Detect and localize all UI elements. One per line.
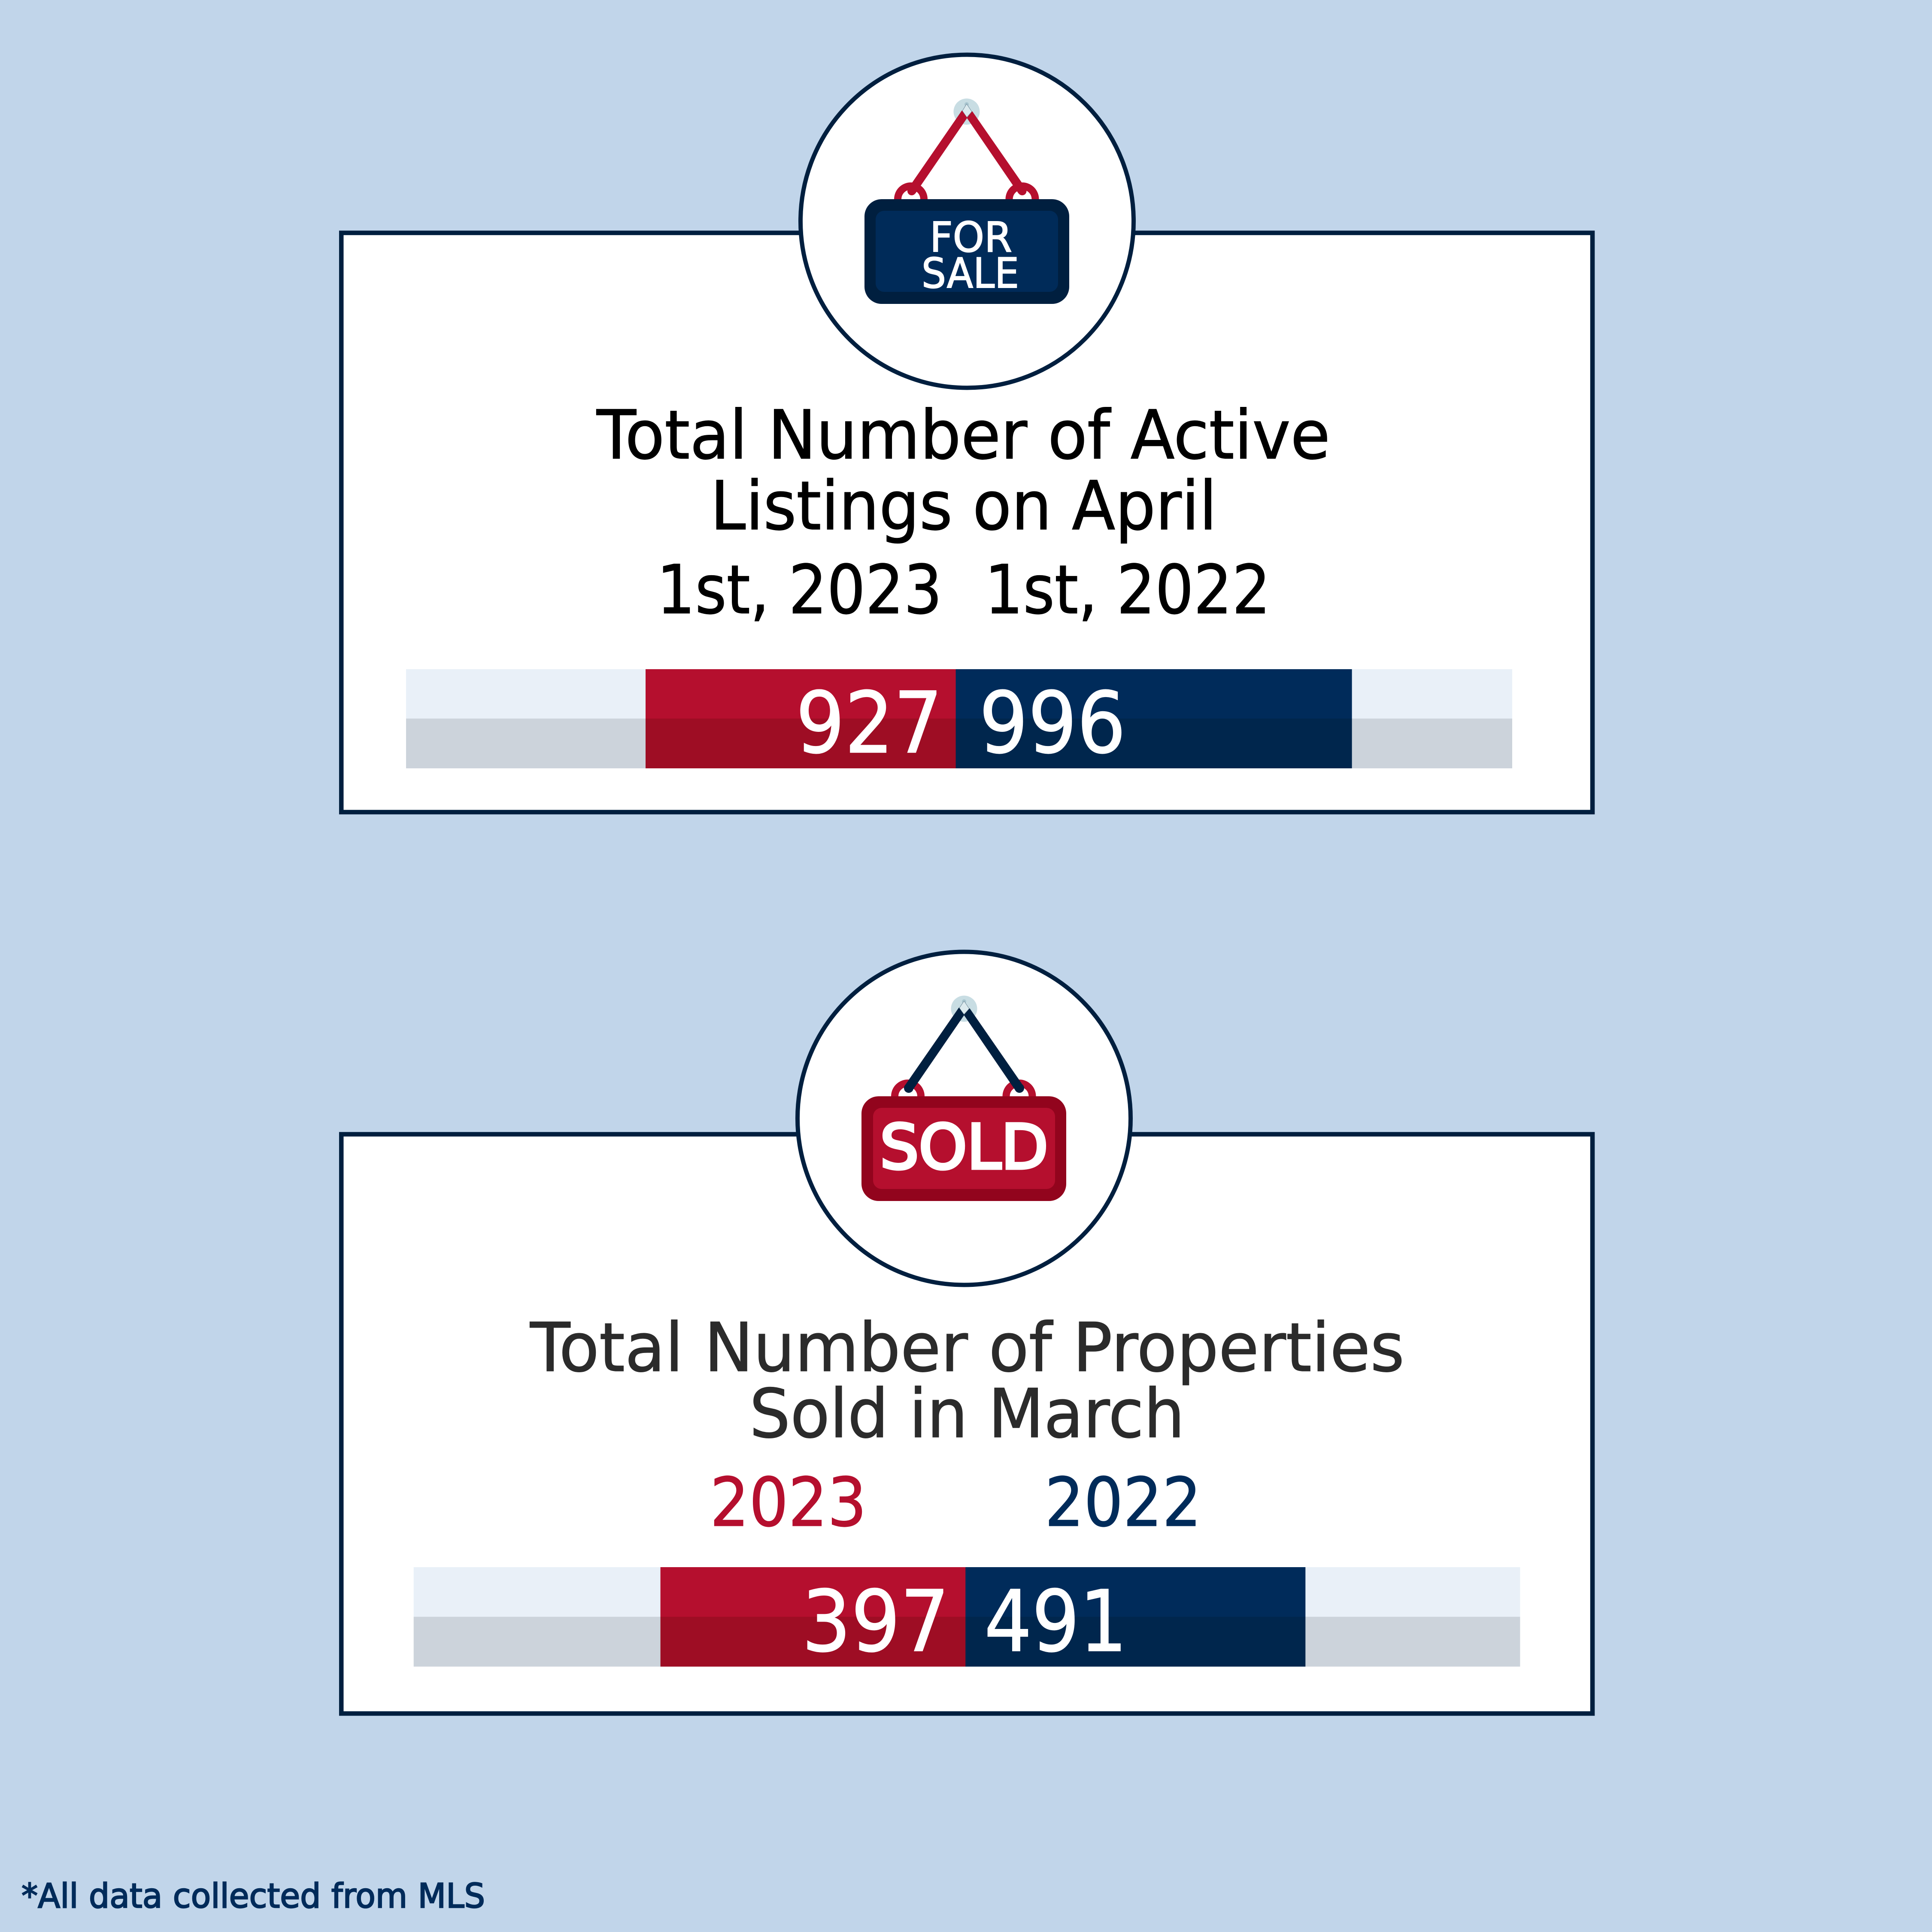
value: 927: 927 bbox=[796, 674, 943, 773]
heading: total number of properties sold: Total Number of Properties bbox=[530, 1309, 1404, 1387]
footnote: data source: *All data collected from MLS bbox=[21, 1877, 485, 1916]
sign text: for sale: SALE bbox=[922, 249, 1019, 297]
sign text: for sale: FOR bbox=[930, 213, 1012, 261]
heading: total number of active listings: 1st, 2023 bbox=[657, 551, 942, 629]
panel frame bbox=[341, 233, 1592, 812]
bar chart: properties sold comparison bbox=[414, 1567, 1520, 1671]
icon: sold hanging sign badge bbox=[798, 952, 1131, 1285]
panel: properties sold bbox=[341, 1134, 1592, 1714]
heading: total number of active listings: Listings on April bbox=[710, 467, 1217, 546]
sign text: sold: SOLD bbox=[880, 1111, 1048, 1183]
heading: total number of active listings: 1st, 2022 bbox=[985, 551, 1271, 629]
heading: total number of properties sold: Sold in March bbox=[749, 1375, 1185, 1453]
legend: year 2023: 2023 bbox=[710, 1464, 867, 1542]
icon: for sale hanging sign badge bbox=[801, 55, 1134, 388]
value: 491: 491 bbox=[984, 1573, 1127, 1671]
legend: year 2022: 2022 bbox=[1045, 1464, 1201, 1542]
heading: total number of active listings: Total Number of Active bbox=[596, 396, 1330, 475]
value: 996: 996 bbox=[979, 674, 1126, 773]
bar chart: active listings comparison bbox=[406, 669, 1512, 773]
value: 397: 397 bbox=[802, 1573, 949, 1671]
sign text: for sale bbox=[922, 213, 1019, 297]
panel frame bbox=[341, 1134, 1592, 1714]
heading: total number of properties sold bbox=[530, 1309, 1404, 1453]
panel: active listings bbox=[341, 233, 1592, 812]
heading: total number of active listings bbox=[596, 396, 1330, 629]
